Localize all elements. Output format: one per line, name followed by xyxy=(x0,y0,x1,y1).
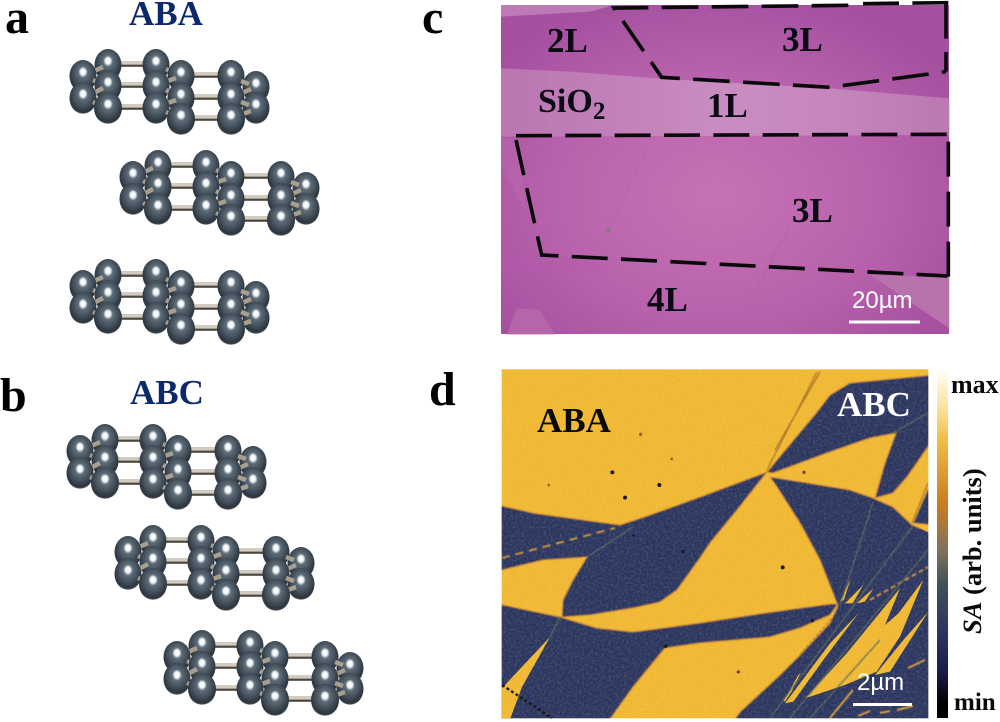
label 3L lower: 3L xyxy=(792,191,833,230)
map image content xyxy=(498,372,932,722)
ABC domains xyxy=(498,375,932,722)
panel letter d: d xyxy=(429,363,456,416)
graphene layer 2 (ABA) xyxy=(120,150,320,236)
scale label 2 µm: 2µm xyxy=(857,669,904,696)
panel: c, optical micrograph xyxy=(501,3,949,334)
defect dots xyxy=(547,433,814,674)
dashed outline: lower 3L region xyxy=(516,134,948,277)
label 1L: 1L xyxy=(707,86,748,125)
colour bar axis title: SA (arb. units) xyxy=(957,468,987,634)
colour bar xyxy=(937,370,999,718)
label 4L: 4L xyxy=(647,280,688,319)
colour bar label max: max xyxy=(951,370,999,399)
scale bar 2 µm xyxy=(853,703,912,706)
graphene layer 2 (ABC) xyxy=(114,525,314,611)
graphene layer 1 (ABA) xyxy=(70,49,270,135)
label 2L: 2L xyxy=(547,21,588,60)
panel: b, ABC stacking xyxy=(0,369,364,716)
panel: a, ABA stacking xyxy=(5,0,320,345)
yellow wedge lower left xyxy=(502,637,550,718)
label SiO2: SiO xyxy=(538,83,593,120)
label ABC: ABC xyxy=(837,385,911,424)
map noise texture xyxy=(502,369,928,718)
dashed outline: upper 3L region xyxy=(614,3,948,87)
graphene layer 1 (ABC) xyxy=(66,424,266,510)
scale bar 20 µm xyxy=(849,320,920,324)
micrograph background xyxy=(501,5,949,334)
label 3L upper: 3L xyxy=(782,20,823,59)
yellow strip right edge xyxy=(918,525,928,532)
panel: d, stacking domain map xyxy=(498,369,932,722)
micrograph terraces xyxy=(501,5,949,334)
label SiO2: 2 xyxy=(593,98,605,125)
black pixel line lower left xyxy=(502,685,552,718)
heading: ABC: ABC xyxy=(130,373,204,412)
domain wall lines xyxy=(502,372,928,718)
colour gradient strip xyxy=(937,371,948,718)
panel letter b: b xyxy=(0,369,27,422)
graphene layer 3 (ABA) xyxy=(70,259,270,345)
scale label 20 µm: 20µm xyxy=(852,287,913,314)
yellow streaks lower right xyxy=(783,578,928,703)
graphene layer 3 (ABC) xyxy=(164,630,364,716)
colour bar label min: min xyxy=(954,689,996,716)
map background (ABA domains) xyxy=(502,369,928,718)
label ABA: ABA xyxy=(537,401,612,440)
